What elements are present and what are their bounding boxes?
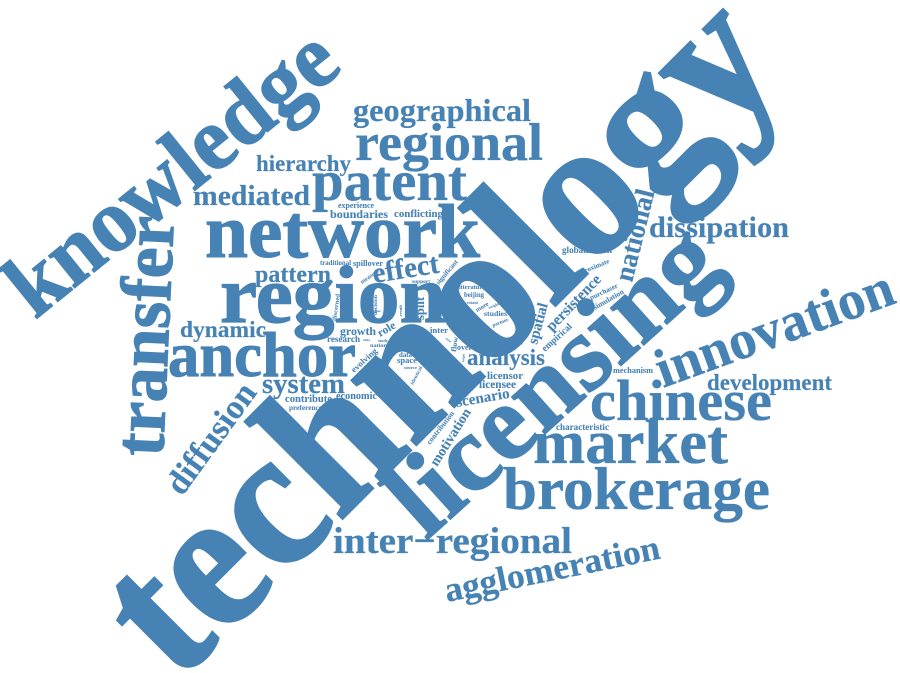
word: spillover: spillover <box>353 259 383 268</box>
word: other: other <box>373 309 381 313</box>
word: chinese: chinese <box>590 368 772 433</box>
word: regional: regional <box>355 114 543 172</box>
word: target: target <box>461 353 466 362</box>
word: brokerage: brokerage <box>503 456 770 522</box>
word: diffusion: diffusion <box>159 376 264 502</box>
word: boundaries: boundaries <box>330 207 388 221</box>
word: hierarchy: hierarchy <box>256 151 351 176</box>
word: purchaser: purchaser <box>588 282 619 302</box>
word: anchor: anchor <box>168 320 356 390</box>
word: dynamic: dynamic <box>180 317 266 343</box>
word: significant: significant <box>435 258 460 286</box>
word: transfer: transfer <box>99 214 190 458</box>
word: dissipation: dissipation <box>649 211 789 244</box>
word: patent: patent <box>312 150 467 213</box>
word: inter: inter <box>430 325 448 335</box>
word: decision: decision <box>373 295 379 315</box>
word: proximate: proximate <box>580 258 611 276</box>
word: discerned: discerned <box>332 293 342 321</box>
word: mediated: mediated <box>193 180 310 212</box>
word: development: development <box>707 370 832 395</box>
word: licensing: licensing <box>362 199 743 559</box>
word: studies: studies <box>484 309 507 318</box>
word: licensee: licensee <box>479 379 516 391</box>
word: partner: partner <box>492 317 510 329</box>
word: empirical: empirical <box>540 321 575 354</box>
word: source: source <box>404 365 417 370</box>
word: traditional: traditional <box>320 260 351 267</box>
word: innovation: innovation <box>646 256 900 399</box>
word: mechanism: mechanism <box>613 366 653 375</box>
word: globalization: globalization <box>562 245 612 255</box>
word: licensor: licensor <box>487 370 523 382</box>
word: evolving: evolving <box>349 346 380 374</box>
word: region: region <box>220 249 446 340</box>
word: space: space <box>397 355 417 365</box>
word: market: market <box>533 409 728 477</box>
word: motivation: motivation <box>428 406 475 469</box>
word: geographical: geographical <box>353 92 531 128</box>
word: flow: flow <box>449 336 460 352</box>
word: river: river <box>444 337 453 344</box>
word: growth: growth <box>340 324 376 338</box>
word: nation: nation <box>370 343 388 349</box>
word: experience: experience <box>338 201 374 210</box>
word: economic: economic <box>336 391 377 402</box>
word: conflicting: conflicting <box>394 208 443 220</box>
word: persistence: persistence <box>543 271 605 335</box>
word: agglomeration: agglomeration <box>441 528 663 610</box>
word: beijing: beijing <box>464 292 485 299</box>
word: more: more <box>474 301 490 314</box>
word: role: role <box>376 320 398 340</box>
word: extant: extant <box>467 301 479 305</box>
word: characteristic: characteristic <box>556 423 609 433</box>
word: research: research <box>327 334 360 344</box>
word: preference: preference <box>289 404 322 412</box>
word: network: network <box>205 190 481 274</box>
word: system: system <box>262 368 345 400</box>
word: split: split <box>413 296 427 320</box>
word: support: support <box>412 279 430 285</box>
word: million: million <box>363 338 370 342</box>
word: analysis: analysis <box>467 345 545 370</box>
word: weight: weight <box>488 302 500 310</box>
word: national: national <box>608 185 661 284</box>
word: literature: literature <box>459 284 485 291</box>
word: scenario: scenario <box>455 386 511 411</box>
word: study: study <box>378 338 389 343</box>
word: measure: measure <box>360 268 381 286</box>
word: pattern: pattern <box>255 262 331 288</box>
word: capacity: capacity <box>507 339 524 351</box>
word: contribution: contribution <box>424 409 457 446</box>
word: over: over <box>457 343 472 352</box>
word: simulation: simulation <box>592 287 626 312</box>
word: contribute: contribute <box>285 394 333 405</box>
word: effect: effect <box>370 248 442 290</box>
word: inter-regional: inter−regional <box>333 521 572 562</box>
word: identical: identical <box>410 365 424 386</box>
word: data: data <box>399 352 413 359</box>
word: result: result <box>398 305 403 316</box>
word: spatial: spatial <box>525 301 552 346</box>
